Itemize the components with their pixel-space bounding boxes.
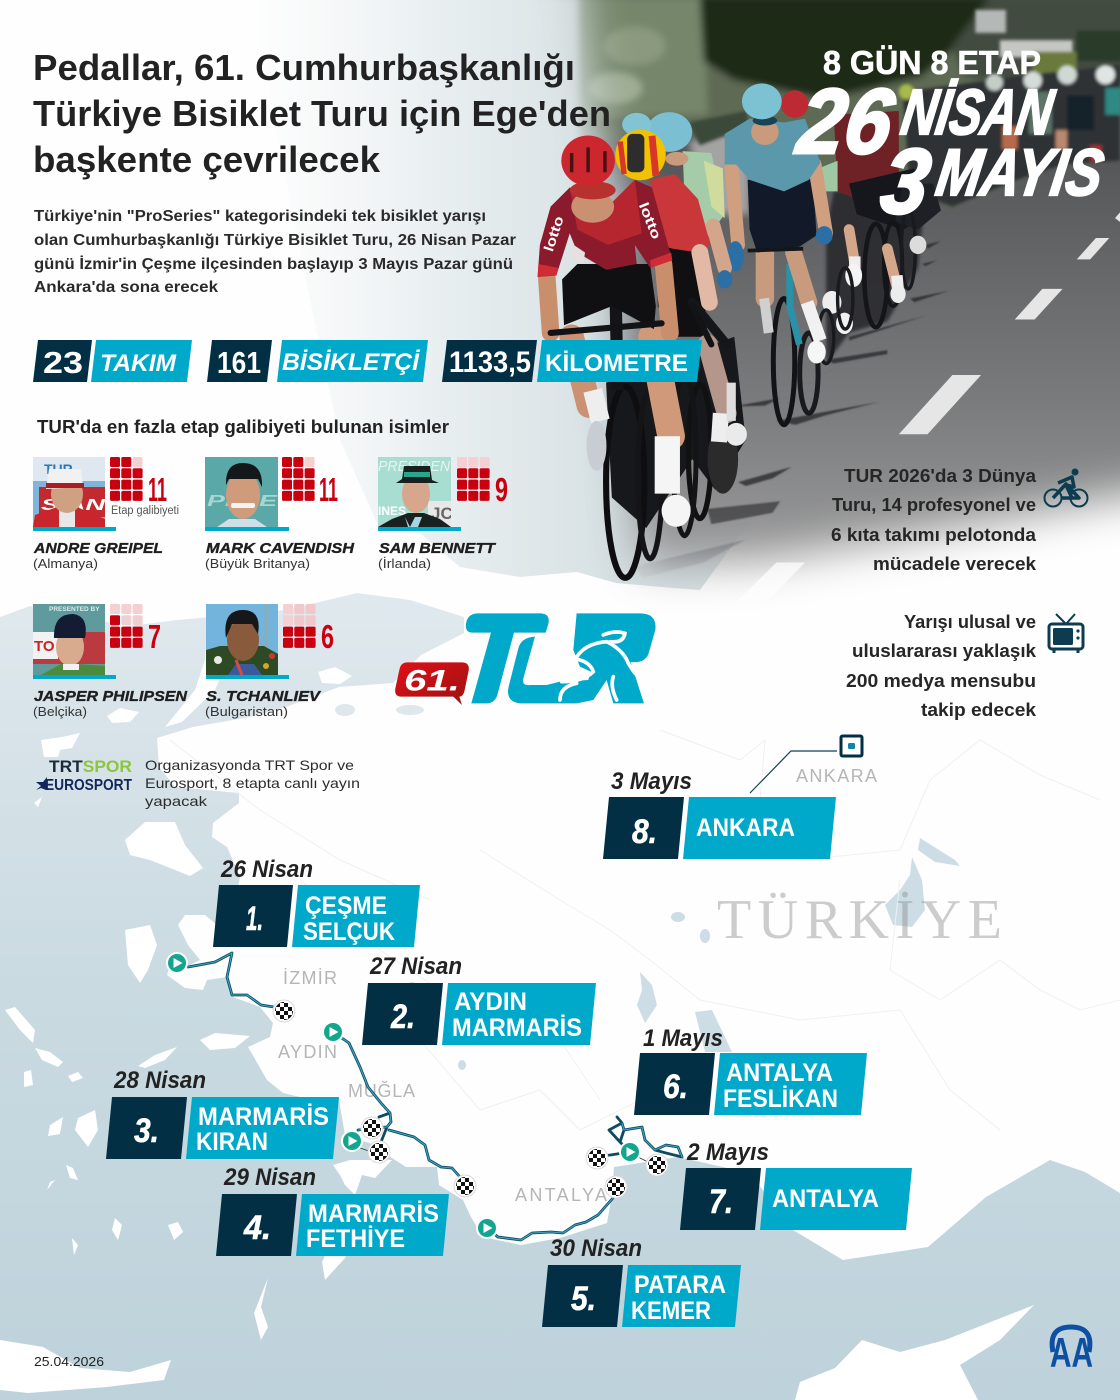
note: teams in the peloton: TUR 2026'da 3 Dünya (844, 466, 1037, 486)
red badge 61 (395, 662, 469, 705)
Anadolu Agency logo (1050, 1327, 1093, 1376)
road shadows (635, 241, 949, 578)
lakes (335, 704, 960, 1093)
title: başkente çevrilecek (33, 139, 381, 180)
TRT Spor and Eurosport logos: EUROSPORT (45, 777, 132, 794)
stage 6: FESLİKAN (723, 1085, 838, 1113)
stat: 161 riders: 161 (217, 345, 261, 380)
stage 3: 28 Nisan (113, 1067, 206, 1094)
win count grid (457, 457, 490, 501)
dates and headline block: 26 (790, 70, 901, 173)
intro text block: günü İzmir'in Çeşme ilçesinden başlayıp 3 Mayıs Pazar günü (34, 255, 513, 273)
stat: 1133,5 kilometres: KİLOMETRE (545, 350, 688, 377)
portrait (33, 457, 106, 527)
portrait: TUR (44, 461, 73, 477)
broadcast note: Eurosport, 8 etapta canlı yayın (145, 775, 360, 791)
note: teams in the peloton: 6 kıta takımı pelotonda (831, 525, 1037, 545)
win count grid (283, 604, 316, 648)
Marmara, Aegean and Mediterranean sea (0, 593, 1120, 1400)
stage 3: 3. (134, 1112, 159, 1150)
rider: Mark Cavendish: 11 (319, 471, 338, 508)
note: media coverage (846, 612, 1037, 720)
rider: Sam Bennett (378, 457, 508, 571)
portrait: PRESIDEN (378, 458, 450, 475)
portrait (33, 604, 105, 675)
portrait: PRESENTED BY (49, 606, 100, 613)
title: Türkiye Bisiklet Turu için Ege'den (33, 93, 611, 134)
dates and headline block: 8 GÜN 8 ETAP (823, 44, 1041, 81)
stage 2: MARMARİS (452, 1014, 582, 1042)
stage 7: 7. (709, 1183, 733, 1221)
front rider in Lotto kit: lotto (541, 214, 567, 253)
stage 5: PATARA (634, 1271, 726, 1299)
stage 1: SELÇUK (303, 918, 395, 946)
title (33, 47, 611, 180)
stage 6 (634, 1025, 867, 1115)
province labels: AYDIN (278, 1042, 337, 1062)
stage 4: 29 Nisan (223, 1164, 316, 1191)
Anadolu Agency logo: AA (1050, 1329, 1093, 1376)
stage 6: 1 Mayıs (643, 1025, 723, 1052)
heading: most stage wins: TUR'da en fazla etap galibiyeti bulunan isimler (37, 417, 449, 437)
broadcast note (145, 757, 360, 809)
portrait: JC (431, 504, 453, 523)
route line highlight (188, 953, 682, 1240)
front rider in Lotto kit (538, 135, 711, 578)
logo: 61. TUR (395, 613, 656, 705)
stage 8 (603, 768, 836, 859)
stage routes (188, 953, 682, 1240)
stage 5: KEMER (631, 1297, 711, 1325)
stage 7: ANTALYA (772, 1185, 879, 1213)
rider in blue jersey (725, 83, 833, 425)
note: media coverage: takip edecek (921, 700, 1037, 720)
stat: 23 teams: 23 (43, 345, 83, 380)
rider: Mark Cavendish: MARK CAVENDISH (206, 540, 355, 557)
province labels: ANKARA (796, 766, 877, 786)
background objects in the distance (975, 10, 1120, 77)
stage 2: 27 Nisan (369, 953, 462, 980)
stat: 1133,5 kilometres: 1133,5 (449, 346, 531, 379)
stage 3: KIRAN (196, 1128, 268, 1156)
stat: 161 riders: BİSİKLETÇİ (282, 349, 420, 376)
stage 5: 5. (571, 1280, 596, 1318)
rider: Sam Bennett: 9 (495, 471, 508, 508)
stage 8: ANKARA (696, 814, 795, 842)
rider: Jasper Philipsen: (Belçika) (33, 704, 87, 719)
TRT Spor and Eurosport logos (36, 757, 132, 794)
stat: 23 teams: TAKIM (100, 350, 177, 377)
win count grid (282, 457, 315, 501)
dates and headline block (790, 44, 1108, 233)
cyclists (538, 83, 941, 578)
route line casing (188, 953, 682, 1240)
title: Pedallar, 61. Cumhurbaşkanlığı (33, 47, 575, 88)
stage 4: MARMARİS (308, 1200, 439, 1228)
rider: Andre Greipel (33, 457, 179, 571)
icon: cyclist (1044, 468, 1088, 506)
stage 6: ANTALYA (726, 1059, 833, 1087)
note: teams in the peloton: Turu, 14 profesyonel ve (832, 495, 1036, 515)
stat: 23 teams (33, 340, 192, 382)
rider: S. Tchanliev: (Bulgaristan) (205, 704, 288, 719)
start and finish markers (166, 952, 668, 1239)
stage 4: 4. (243, 1209, 271, 1247)
rider: Andre Greipel: (Almanya) (33, 556, 98, 571)
rider: Sam Bennett: (İrlanda) (378, 556, 431, 571)
stage 7 (680, 1139, 912, 1230)
cyclist cut-out (560, 632, 637, 700)
dates and headline block: NİSAN (897, 76, 1059, 148)
publication date: 25.04.2026 (34, 1354, 104, 1369)
portrait: TO (34, 638, 55, 655)
intro text block (34, 208, 516, 296)
broadcast note: yapacak (145, 793, 208, 809)
stage 2 (362, 953, 596, 1045)
note: teams in the peloton: mücadele verecek (873, 554, 1037, 574)
stage 2: 2. (390, 998, 415, 1036)
intro text block: Ankara'da sona erecek (34, 279, 218, 296)
province labels: ANTALYA (515, 1185, 607, 1205)
lighter road patch and guard rail (688, 126, 750, 214)
stage 8: 8. (632, 813, 657, 851)
portrait (205, 457, 279, 527)
stage 1: 26 Nisan (220, 856, 313, 883)
stage 3: MARMARİS (198, 1103, 329, 1131)
stage 4: FETHİYE (306, 1225, 405, 1253)
portrait (378, 457, 453, 527)
dates and headline block: 3 (875, 130, 937, 233)
rider: S. Tchanliev: 6 (321, 618, 334, 655)
rider: Mark Cavendish (205, 457, 355, 571)
TUR lettering (466, 613, 656, 703)
rider: Mark Cavendish: (Büyük Britanya) (205, 556, 310, 571)
portrait: PI DE (207, 493, 279, 510)
race photo background (558, 0, 1120, 592)
rider: Jasper Philipsen (33, 604, 188, 719)
note: media coverage: Yarışı ulusal ve (904, 612, 1036, 632)
win count grid (110, 604, 143, 648)
note: media coverage: 200 medya mensubu (846, 671, 1036, 691)
note: teams in the peloton (831, 466, 1037, 574)
rider: Andre Greipel: 11 (148, 471, 167, 508)
win count grid (110, 457, 143, 501)
icon: television (1049, 614, 1083, 653)
front rider in Lotto kit: lotto (636, 200, 664, 241)
TRT Spor and Eurosport logos: TRTSPOR (49, 757, 132, 776)
intro text block: olan Cumhurbaşkanlığı Türkiye Bisiklet Turu, 26 Nisan Pazar (34, 232, 516, 249)
rider: Sam Bennett: SAM BENNETT (379, 540, 497, 557)
stage 6: 6. (663, 1068, 688, 1106)
stage 1 (213, 856, 420, 947)
rider: S. Tchanliev: S. TCHANLIEV (206, 688, 322, 705)
portrait: S AN (41, 497, 106, 514)
stat: 1133,5 kilometres (442, 340, 702, 382)
rider in yellow helmet and teal rider (606, 112, 747, 528)
Black Sea fade (250, 0, 780, 590)
rider: Jasper Philipsen: 7 (148, 618, 161, 655)
country label: TÜRKİYE (717, 889, 1002, 951)
intro text block: Türkiye'nin "ProSeries" kategorisindeki tek bisiklet yarışı (34, 208, 486, 225)
stat: 161 riders (207, 340, 428, 382)
stage 4 (216, 1164, 449, 1256)
islands, peninsulas, Crete and Cyprus (0, 612, 1034, 1400)
rider: Andre Greipel: ANDRE GREIPEL (33, 540, 163, 557)
stage 5: 30 Nisan (550, 1235, 642, 1262)
rider: Jasper Philipsen: JASPER PHILIPSEN (34, 688, 188, 705)
province borders (170, 730, 1120, 1130)
note: media coverage: uluslararası yaklaşık (852, 641, 1037, 661)
lane dashes (738, 212, 1120, 600)
distant peloton (899, 65, 1120, 207)
Ankara finish marker (750, 736, 862, 793)
stage 2: AYDIN (454, 988, 527, 1016)
stage 8: 3 Mayıs (611, 768, 692, 795)
province labels (278, 766, 877, 1205)
province labels: İZMİR (283, 968, 337, 988)
stage 7: 2 Mayıs (686, 1139, 769, 1166)
stage 5 (542, 1235, 741, 1327)
stage 1: ÇEŞME (305, 892, 387, 920)
red badge 61: 61. (404, 665, 460, 698)
rider: Andre Greipel: Etap galibiyeti (111, 505, 179, 517)
province labels: MUĞLA (348, 1080, 415, 1101)
broadcast note: Organizasyonda TRT Spor ve (145, 757, 354, 773)
rear riders (781, 90, 941, 364)
portrait (206, 604, 278, 675)
trees (548, 0, 1120, 172)
stage 3 (106, 1067, 339, 1159)
road (576, 0, 1120, 592)
rider: S. Tchanliev (205, 604, 334, 719)
stage 1: 1. (246, 900, 263, 938)
portrait: INES (378, 504, 406, 518)
